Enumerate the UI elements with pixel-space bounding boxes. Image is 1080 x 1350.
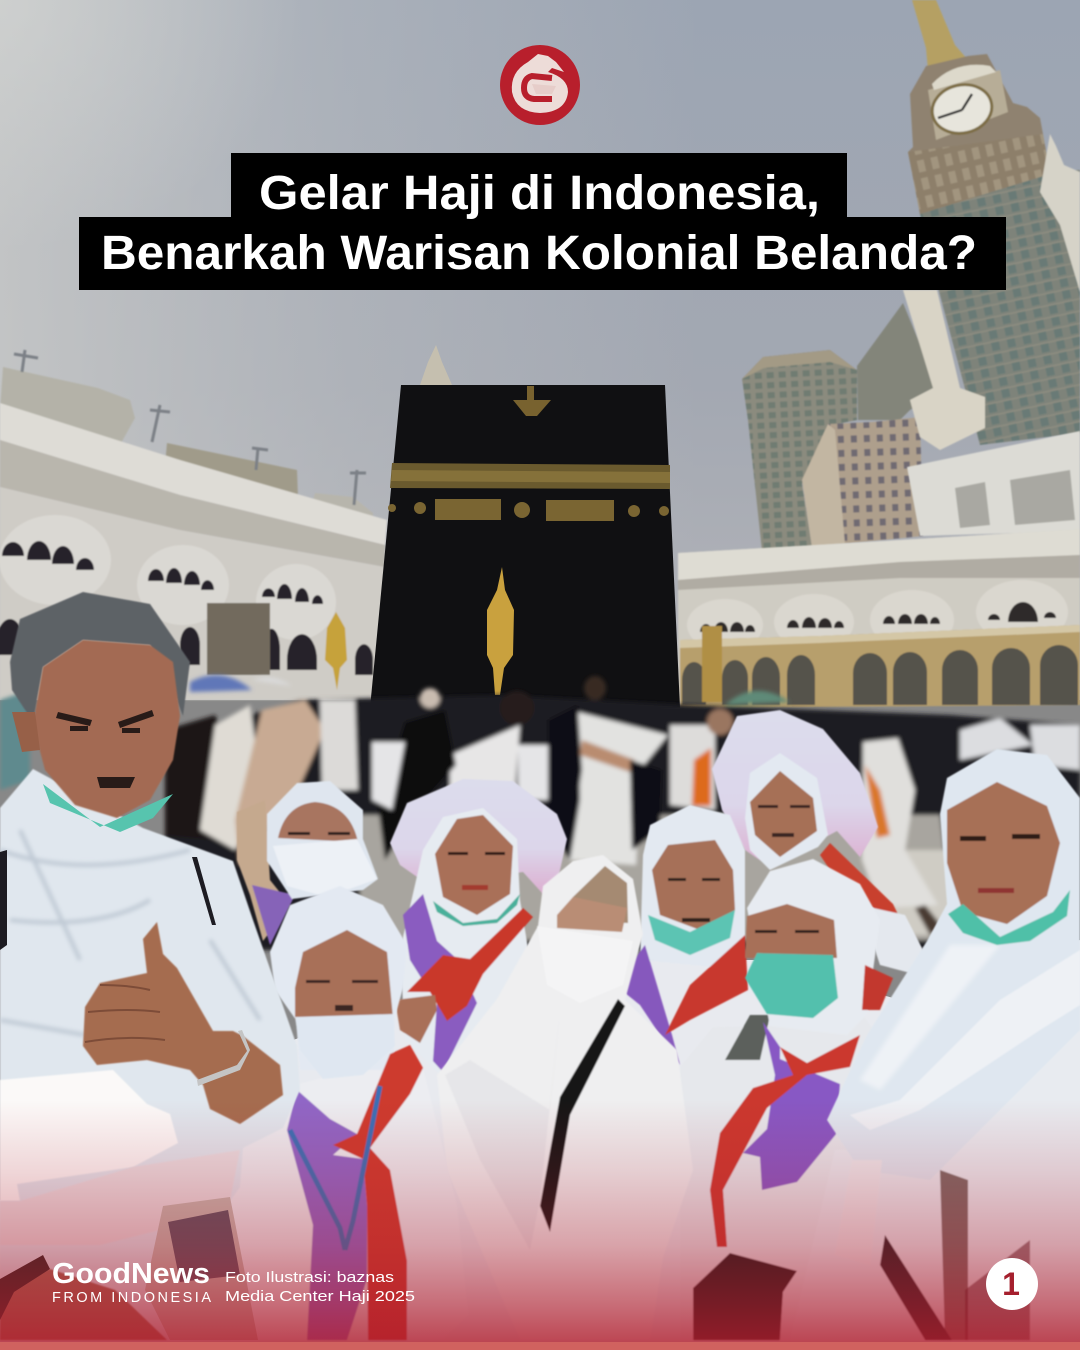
red scarf [665,935,748,1035]
photo credit: Foto Ilustrasi: baznas [225,1269,394,1286]
man face [33,640,180,818]
clock tower top [908,0,1050,214]
gold lantern [325,612,347,690]
background crowd and floor [0,675,1080,950]
background sky [0,0,1080,700]
cap [267,781,378,899]
white mask [295,1014,395,1079]
blue lanyard [290,1086,380,1250]
scaffold [207,603,270,675]
cap [270,886,407,1070]
mask [537,926,633,1003]
face [435,815,513,915]
robe [790,1000,1080,1340]
lower hand and watch [0,1269,167,1340]
pilgrim with orange bag [862,738,938,908]
person: front woman with white mask and red scarf [230,886,468,1340]
man with beard [450,725,520,790]
right skyline buildings and clock tower [742,0,1080,551]
green mask [648,910,735,955]
upper arch windows [700,602,1056,632]
right minaret [1040,134,1080,292]
red at side [862,965,893,1010]
title line one: Gelar Haji di Indonesia, [259,167,820,220]
centre pilgrim shoulders [568,712,668,865]
floor [360,815,955,940]
back buildings [0,367,135,445]
veil [827,749,1080,1180]
black bag strap [540,999,625,1232]
brim [712,710,878,867]
face [295,930,393,1020]
gold panels [388,499,669,521]
face [652,840,735,930]
teal mask [745,953,838,1018]
person: right woman in lace veil with green mask [790,749,1080,1340]
person: woman with wide hat, back right [712,710,923,975]
wall [0,487,385,700]
man hair [10,592,190,722]
finger lines [85,985,165,1042]
minaret behind Kaaba [420,345,452,385]
robe folds [0,830,260,1035]
crowd base [165,695,1080,950]
veil and robe [437,855,693,1340]
red scarf [407,908,533,1021]
booklet on lanyard [145,1197,258,1340]
white retouch patch [0,1070,178,1201]
right white building and colonnade [678,431,1080,708]
Kaaba [370,345,680,708]
GoodNews from Indonesia logo: GoodNews [52,1258,210,1290]
robe [680,1010,880,1340]
GoodNews from Indonesia logo [52,1258,211,1306]
purple scarf [615,945,680,1065]
woman's hand [395,995,437,1043]
purple scarf [743,1022,840,1190]
face [745,904,837,958]
left colonnade [0,350,387,700]
title block [79,153,1006,290]
bird ring [512,54,568,113]
bottom colour bar [0,1342,1080,1350]
man facial features [56,710,154,788]
arch frames [0,515,336,640]
gold kiswah band [390,463,670,489]
maqam Ibrahim lantern [487,567,514,695]
person: woman in white cap and mask, back left [237,781,378,945]
lower cloth [0,1150,240,1245]
arch windows [0,541,373,675]
hood [747,859,880,1035]
upper arch frames [687,580,1068,651]
person: woman in green mask, centre right [615,805,748,1065]
tan building [802,417,923,547]
red scarf [820,843,920,960]
colonnade wall [678,529,1080,705]
photo credit: Media Center Haji 2025 [225,1288,415,1305]
black bag [693,1253,797,1340]
left crowd [165,715,235,840]
brim [390,779,567,894]
page number badge [986,1258,1038,1310]
person: woman in full white veil and mask, centre [437,855,693,1340]
veil and robe [400,808,530,1075]
page number badge: 1 [1002,1266,1020,1302]
purple scarf [403,894,477,1072]
title line backgrounds [79,153,1006,290]
brown head wrap [565,866,628,923]
orange vest pilgrim [670,725,715,810]
woman in black [378,710,456,860]
man bracelet [197,1030,250,1086]
person: woman with teal mask and red scarf [680,859,893,1340]
purple scarf [287,1090,367,1340]
ear [12,712,40,752]
face [750,771,817,857]
lamp poles [14,350,366,505]
roof parapet and band [0,403,387,545]
barriers [372,742,548,810]
beige scarf and purple ribbon [237,800,290,941]
logo badge [500,45,580,125]
facial features [960,834,1040,893]
person: woman with wide hat, centre left [390,779,567,1075]
black abayas [548,705,662,860]
top emblem [513,386,551,416]
red scarf [333,1045,423,1340]
GoodNews from Indonesia logo: FROM INDONESIA [52,1290,211,1306]
white building [907,431,1080,536]
man green mask [43,784,173,832]
mask [273,839,377,897]
far right white pilgrims [960,718,1080,770]
bottom red gradient overlay [0,1100,1080,1342]
green mask strap [433,894,520,926]
second hotel block [857,303,940,420]
veil [745,753,828,870]
G letter [524,76,552,99]
person: man in white ihram giving thumbs up [0,592,300,1340]
photo credit [225,1269,415,1305]
white minaret [903,290,985,450]
cap [640,805,745,970]
shoulder straps [0,850,216,950]
face [278,802,358,842]
tall building [742,350,857,551]
man body [0,769,300,1340]
robe [230,1060,468,1340]
red scarf [710,1035,860,1247]
man thumbs-up hand and forearm [83,922,283,1124]
white bottle and strap [835,1160,882,1265]
golden arcade [680,625,1080,708]
hotel tower shaft [920,170,1080,445]
soffit [0,440,385,567]
face [557,897,627,932]
white robes base behind the group [0,940,1080,1342]
green mask [948,890,1070,945]
title line two: Benarkah Warisan Kolonial Belanda? [101,227,977,280]
face [947,782,1060,924]
